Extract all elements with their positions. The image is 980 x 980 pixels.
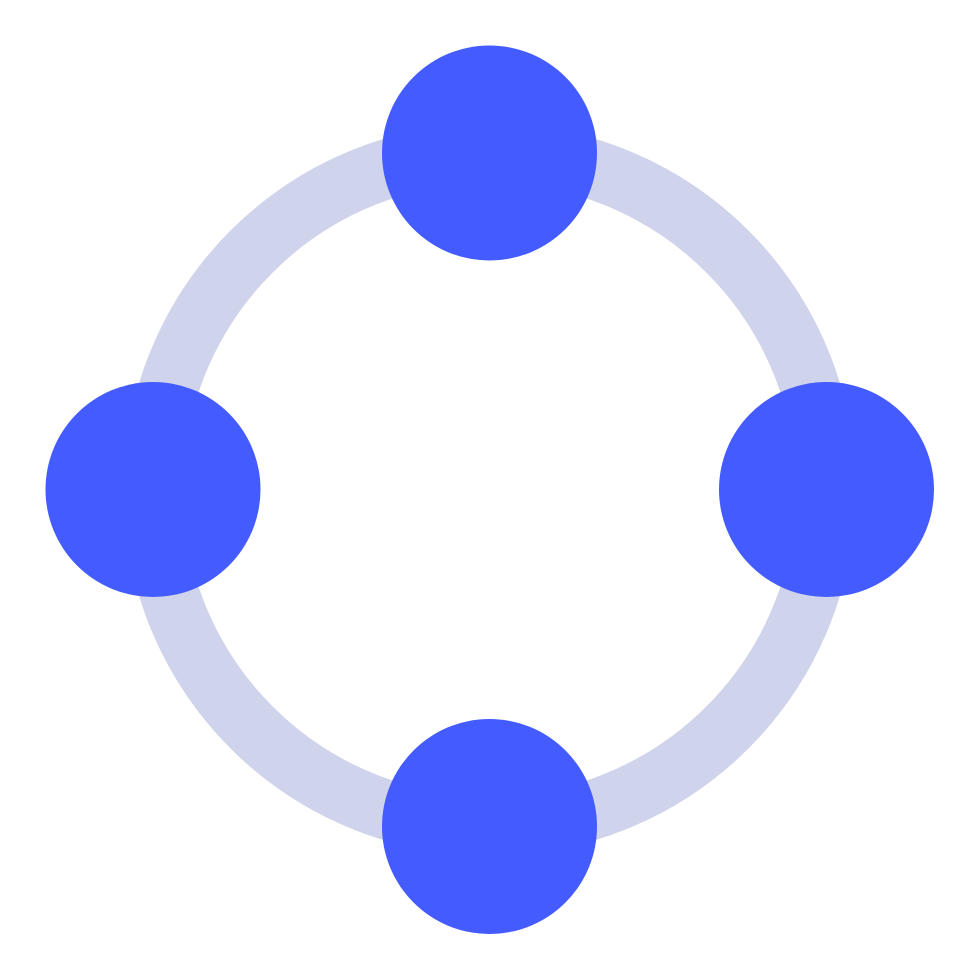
node: bottom (382, 719, 597, 934)
node: top (382, 46, 597, 260)
node: left (46, 382, 260, 597)
connecting ring (153, 153, 826, 826)
node: right (719, 382, 934, 597)
